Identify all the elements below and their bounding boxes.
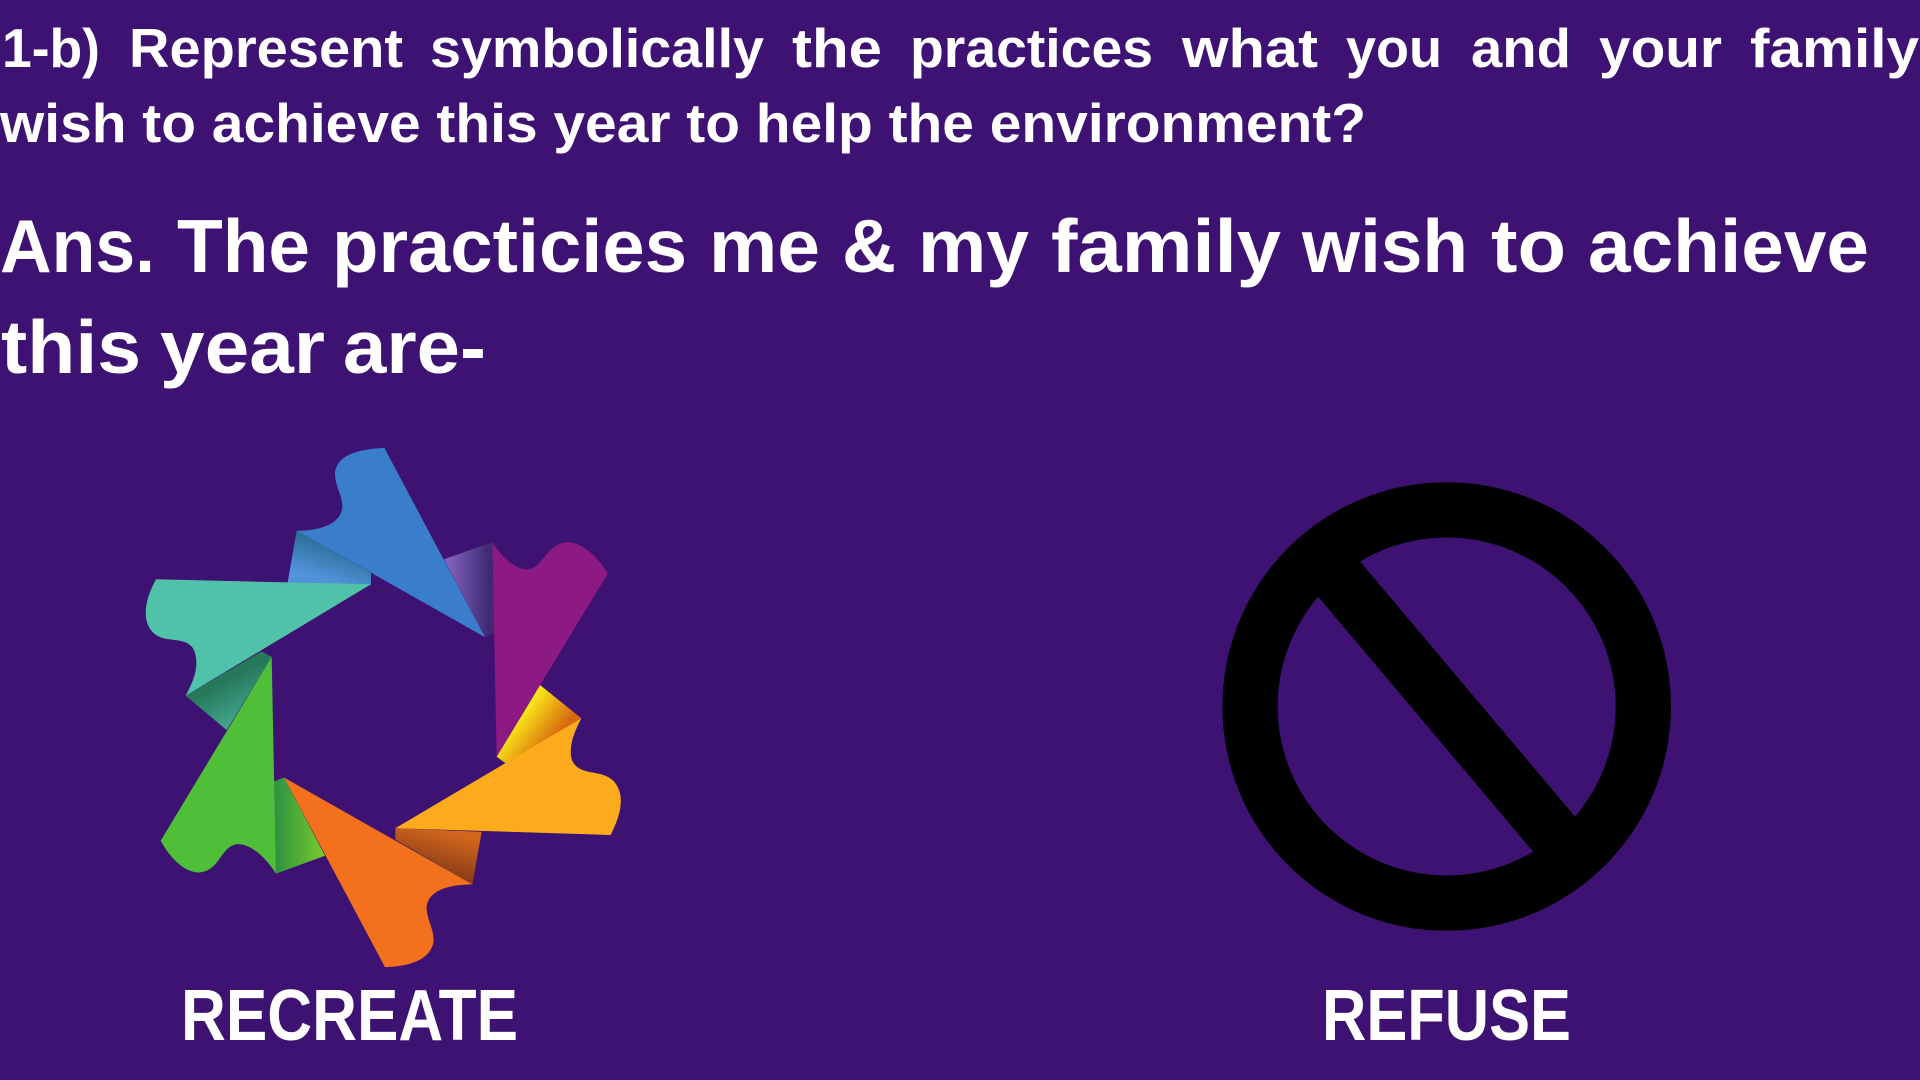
answer heading: practicies	[332, 204, 687, 288]
answer heading: &	[842, 204, 896, 288]
fold: green	[274, 777, 325, 874]
answer heading: family	[1051, 204, 1281, 288]
answer heading: to	[1491, 204, 1566, 288]
question text: what	[1181, 17, 1318, 79]
fold: yellow	[497, 685, 581, 764]
question text: the	[792, 17, 882, 79]
label: refuse: REFUSE	[1322, 976, 1571, 1056]
answer heading	[0, 204, 1869, 389]
question text	[0, 17, 1919, 154]
question text: practices	[910, 17, 1153, 79]
petal: blue	[297, 448, 485, 637]
fold: brown	[395, 828, 482, 884]
question text: wish to achieve this year to help the environment?	[0, 92, 1366, 154]
answer heading: achieve	[1588, 204, 1869, 288]
petal: amber	[395, 718, 621, 835]
question text: Represent	[129, 17, 403, 79]
answer heading: year	[160, 305, 325, 389]
petal: teal	[146, 579, 371, 696]
answer heading: wish	[1301, 204, 1468, 288]
question text: symbolically	[430, 17, 764, 79]
answer heading: are-	[343, 305, 486, 389]
petal: purple	[492, 542, 608, 757]
question text: family	[1750, 17, 1919, 79]
icon: recreate colourful folded ring	[146, 448, 621, 967]
icon: prohibition sign	[1222, 482, 1671, 931]
question text: 1-b)	[2, 17, 100, 79]
question text: and	[1471, 17, 1571, 79]
fold: violet	[444, 542, 494, 637]
petal: orange	[284, 777, 472, 967]
question text: you	[1346, 17, 1442, 79]
petal: green	[161, 657, 276, 874]
fold: blue	[288, 531, 371, 585]
answer heading: Ans.	[0, 204, 155, 288]
answer heading: me	[709, 204, 820, 288]
question text: your	[1599, 17, 1722, 79]
answer heading: my	[918, 204, 1029, 288]
answer heading: The	[177, 204, 310, 288]
fold: teal	[186, 651, 272, 730]
label: recreate: RECREATE	[181, 976, 518, 1056]
answer heading: this	[1, 305, 141, 389]
